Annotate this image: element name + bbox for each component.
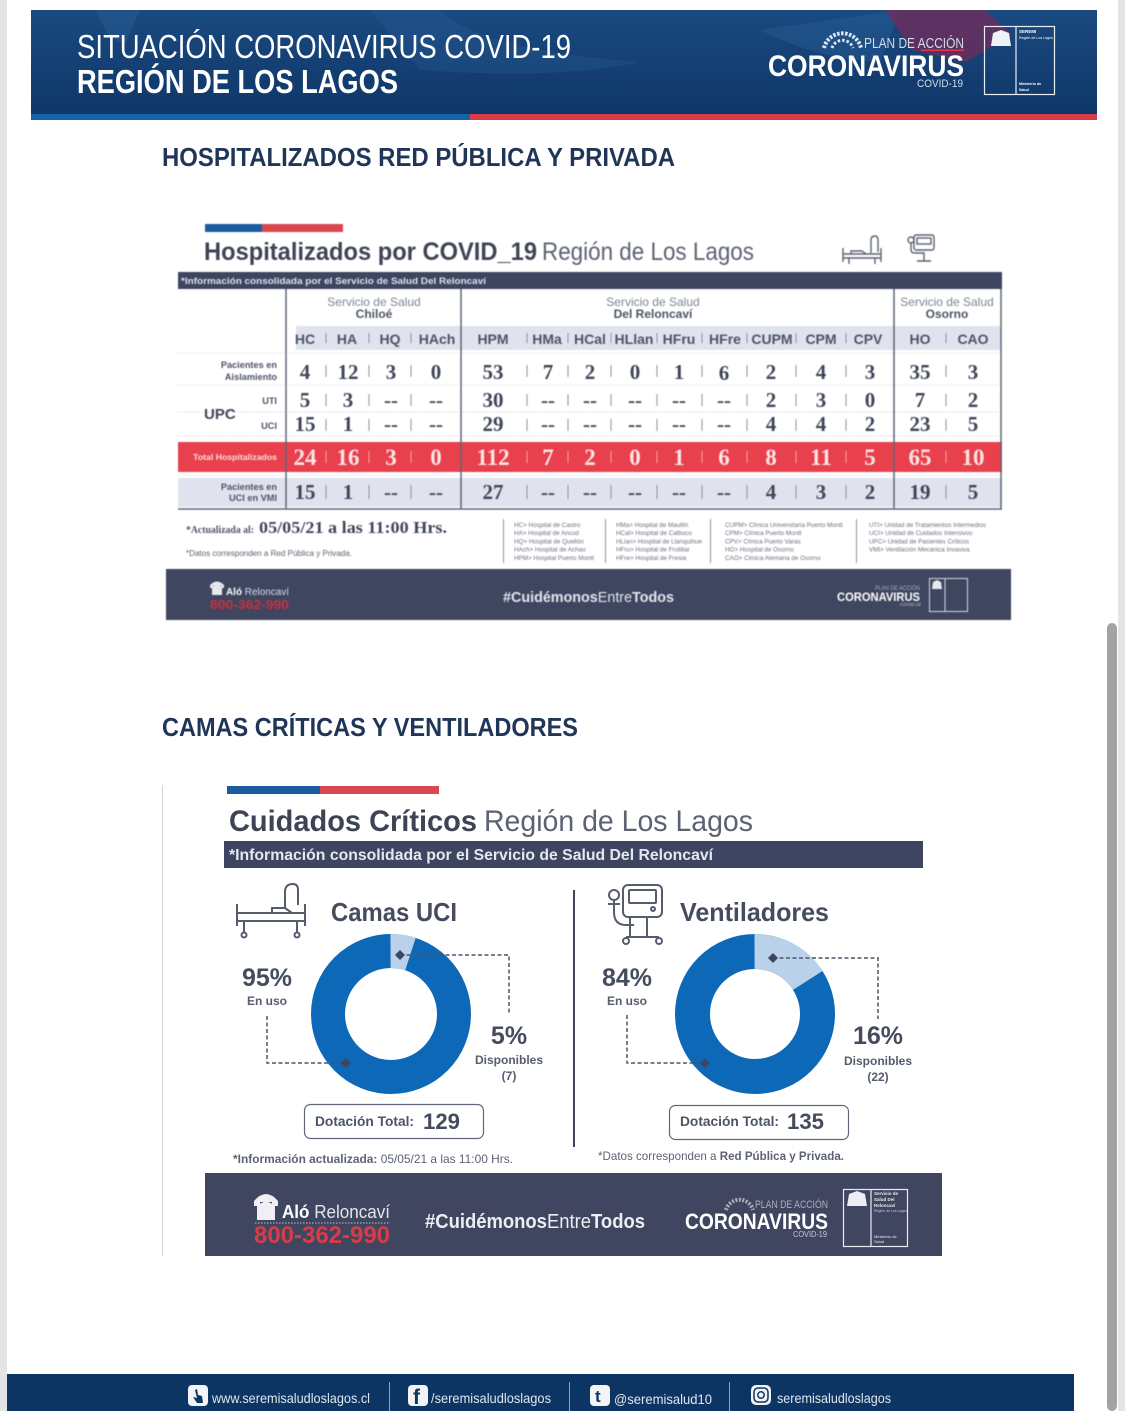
link: web xyxy=(188,1385,370,1406)
callout: en uso: 84% xyxy=(602,964,652,992)
row: pacientes en UCI en VMI: 15 xyxy=(294,480,316,504)
row: UCI: -- xyxy=(583,412,597,436)
row labels: UPC xyxy=(204,406,236,423)
logo: coronavirus: PLAN DE ACCIÓN xyxy=(755,1198,828,1211)
table title: Región de Los Lagos xyxy=(542,238,754,266)
callout: en uso: 95% xyxy=(242,964,292,992)
link: facebook: /seremisaludloslagos xyxy=(431,1390,551,1406)
row: pacientes en aislamiento: 6 xyxy=(719,361,729,385)
icon: hospital bed xyxy=(237,884,305,938)
dotación total xyxy=(304,1104,484,1138)
heading: camas críticas: CAMAS CRÍTICAS Y VENTILADORES xyxy=(162,712,578,742)
column headers: CPV xyxy=(854,331,883,347)
legend of abbreviations: HAch> Hospital de Achao xyxy=(514,546,586,554)
row: UTI: 3 xyxy=(816,388,826,412)
row: pacientes en UCI en VMI: -- xyxy=(384,480,398,504)
logo: coronavirus xyxy=(685,1198,828,1239)
footer band: table: #CuidémonosEntreTodos xyxy=(503,589,674,606)
row: UCI: 4 xyxy=(816,412,827,436)
row: pacientes en aislamiento: 4 xyxy=(816,360,827,384)
row: pacientes en aislamiento: 35 xyxy=(910,360,930,384)
row: pacientes en aislamiento: 12 xyxy=(338,360,358,384)
row: pacientes en UCI en VMI: 1 xyxy=(343,480,353,504)
row: total hospitalizados: 0 xyxy=(430,445,442,470)
row labels: UTI xyxy=(262,396,277,406)
column headers: HC xyxy=(295,331,315,347)
panel title: Cuidados Críticos xyxy=(229,805,477,838)
column headers: HCal xyxy=(574,331,606,347)
row: pacientes en UCI en VMI: 2 xyxy=(865,480,875,504)
column headers: HFru xyxy=(663,331,695,347)
column headers: CUPM xyxy=(751,331,793,347)
row: total hospitalizados: 11 xyxy=(810,445,832,470)
banner title: SITUACIÓN CORONAVIRUS COVID-19 xyxy=(77,28,571,65)
column headers: CPM xyxy=(805,331,837,347)
hotline: 800-362-990 xyxy=(254,1222,390,1249)
icon: telephone xyxy=(254,1194,278,1220)
row: UTI: 3 xyxy=(343,388,353,412)
donut chart: camas UCI xyxy=(328,951,454,1077)
callout: disponibles: 16% xyxy=(853,1022,903,1050)
row: total hospitalizados: 65 xyxy=(908,445,932,470)
header bands xyxy=(178,326,1002,507)
note: *Información actualizada: 05/05/21 a las 11:00 Hrs. xyxy=(233,1152,513,1166)
divider xyxy=(573,890,575,1147)
legend of abbreviations: HFru> Hospital de Frutillar xyxy=(616,546,690,554)
panel title: Región de Los Lagos xyxy=(484,805,753,838)
section: camas UCI xyxy=(233,884,543,1166)
row: total hospitalizados: 24 xyxy=(294,445,317,470)
footer band: cuidados críticos xyxy=(205,1173,942,1256)
row: UTI: -- xyxy=(384,388,398,412)
row: total hospitalizados: 3 xyxy=(385,445,397,470)
banner colour strip xyxy=(31,114,1097,120)
row: pacientes en aislamiento: 3 xyxy=(386,360,396,384)
column headers: HAch xyxy=(419,331,455,347)
footer band: table: 800-362-990 xyxy=(210,598,289,612)
row: UTI: -- xyxy=(541,388,555,412)
row: pacientes en aislamiento: 2 xyxy=(766,360,776,384)
column headers: HQ xyxy=(380,331,401,347)
row: pacientes en aislamiento: 53 xyxy=(482,360,504,384)
row labels: Total Hospitalizados xyxy=(193,452,277,462)
logo: seremi ministerio de salud: Región de Los Lagos xyxy=(1019,36,1053,40)
icon: hospital bed xyxy=(843,236,881,264)
total row separators xyxy=(326,451,946,463)
logo: coronavirus: CORONAVIRUS xyxy=(685,1209,828,1234)
callout: disponibles: 5% xyxy=(491,1022,527,1050)
service labels: Chiloé xyxy=(356,307,393,321)
hotline xyxy=(254,1202,390,1249)
hotline: Aló Reloncaví xyxy=(282,1202,390,1222)
row: UTI: 30 xyxy=(482,388,504,412)
legend of abbreviations: CPM> Clínica Puerto Montt xyxy=(725,530,802,537)
info bar: *Información consolidada por el Servicio de Salud Del Reloncaví xyxy=(229,847,714,864)
legend of abbreviations: VMI> Ventilación Mecánica Invasiva xyxy=(869,546,970,554)
row: UTI: -- xyxy=(672,388,686,412)
row: pacientes en aislamiento: 4 xyxy=(300,360,311,384)
service labels: Del Reloncaví xyxy=(614,307,693,321)
panel title xyxy=(229,805,753,838)
footer band: table: PLAN DE ACCIÓN xyxy=(875,585,920,592)
header banner xyxy=(31,10,1097,120)
row: pacientes en aislamiento: 3 xyxy=(865,360,875,384)
logo: servicio de salud: Ministerio de xyxy=(874,1234,897,1239)
banner title: REGIÓN DE LOS LAGOS xyxy=(77,63,398,100)
logo: servicio de salud xyxy=(844,1189,908,1247)
row labels: Pacientes en xyxy=(221,482,277,492)
row: UTI: -- xyxy=(717,388,731,412)
dotación total: Dotación Total: xyxy=(315,1113,414,1129)
row: UTI: 7 xyxy=(915,388,925,412)
link: tumblr: t xyxy=(595,1387,601,1406)
row: pacientes en aislamiento: 2 xyxy=(585,360,595,384)
footer band: table xyxy=(166,569,1011,620)
update note xyxy=(186,518,447,558)
row labels: Pacientes en xyxy=(221,360,277,370)
row: pacientes en UCI en VMI: 4 xyxy=(766,480,777,504)
legend of abbreviations: CAO> Clínica Alemana de Osorno xyxy=(725,555,821,562)
row: pacientes en UCI en VMI: -- xyxy=(541,480,555,504)
callout: disponibles: (22) xyxy=(867,1070,889,1084)
logo: seremi ministerio de salud: SEREMI xyxy=(1019,29,1036,34)
column headers: HO xyxy=(910,331,931,347)
row: pacientes en aislamiento: 1 xyxy=(674,360,684,384)
legend of abbreviations: HQ> Hospital de Quellón xyxy=(514,538,584,546)
row: total hospitalizados: 5 xyxy=(864,445,876,470)
row labels: UCI en VMI xyxy=(229,493,277,503)
dotación total: Dotación Total: xyxy=(680,1113,779,1129)
panel: hospitalizados table xyxy=(166,224,1011,620)
update note: *Datos corresponden a Red Pública y Privada. xyxy=(186,549,352,558)
row: UCI: -- xyxy=(384,412,398,436)
row: UTI: 2 xyxy=(968,388,978,412)
donut chart: ventiladores xyxy=(692,952,818,1076)
legend of abbreviations: CPV> Clínica Puerto Varas xyxy=(725,538,801,546)
panel: cuidados críticos xyxy=(162,785,942,1256)
link: tumblr: @seremisalud10 xyxy=(614,1391,712,1407)
legend of abbreviations: HLlan> Hospital de Llanquihue xyxy=(616,538,702,546)
legend of abbreviations: UCI> Unidad de Cuidados Intensivos xyxy=(869,530,972,537)
logo: coronavirus: COVID-19 xyxy=(793,1230,828,1239)
row: total hospitalizados: 16 xyxy=(336,445,360,470)
row: UCI: -- xyxy=(672,412,686,436)
icon: ventilator xyxy=(908,235,934,261)
row: UCI: -- xyxy=(628,412,642,436)
column headers: HA xyxy=(337,331,357,347)
info bar: *Información consolidada por el Servicio de Salud Del Reloncaví xyxy=(181,276,486,287)
row: total hospitalizados: 2 xyxy=(584,445,596,470)
icon: ventilator xyxy=(608,885,662,944)
row: total hospitalizados: 112 xyxy=(476,445,510,470)
row: pacientes en UCI en VMI: 19 xyxy=(910,480,930,504)
logo: plan de acción coronavirus: PLAN DE ACCIÓN xyxy=(864,35,964,52)
service labels xyxy=(327,295,994,321)
callout: en uso: En uso xyxy=(607,994,647,1008)
callout: en uso xyxy=(602,964,710,1068)
footer bar: social links xyxy=(7,1374,1074,1411)
callout: disponibles: (7) xyxy=(502,1069,516,1083)
link: tumblr xyxy=(590,1385,712,1407)
link: web: www.seremisaludloslagos.cl xyxy=(211,1390,370,1406)
callout: disponibles xyxy=(768,953,912,1084)
row: total hospitalizados: 6 xyxy=(718,445,730,470)
row: UCI: -- xyxy=(717,412,731,436)
legend of abbreviations: HC> Hospital de Castro xyxy=(514,522,581,529)
column headers: HLlan xyxy=(615,331,653,347)
column headers xyxy=(295,331,989,347)
row: pacientes en UCI en VMI: 27 xyxy=(482,480,504,504)
link: instagram xyxy=(751,1385,891,1406)
service labels: Servicio de Salud xyxy=(327,295,421,309)
row: UTI: -- xyxy=(628,388,642,412)
row: UTI: -- xyxy=(429,388,443,412)
row labels: UCI xyxy=(261,421,277,431)
row: total hospitalizados: 1 xyxy=(673,445,685,470)
row: UCI: 4 xyxy=(766,412,777,436)
legend of abbreviations: HPM> Hospital Puerto Montt xyxy=(514,555,594,562)
row: UCI: 23 xyxy=(910,412,930,436)
footer band: table: COVID-19 xyxy=(900,602,921,607)
row: UCI: 1 xyxy=(343,412,353,436)
row: UTI: 5 xyxy=(300,388,310,412)
row labels: Aislamiento xyxy=(225,372,277,382)
dotación total xyxy=(670,1106,848,1140)
service labels: Servicio de Salud xyxy=(900,295,994,309)
row: pacientes en aislamiento xyxy=(300,360,978,385)
row labels xyxy=(193,360,277,503)
info bar xyxy=(224,841,923,868)
row: UCI: -- xyxy=(429,412,443,436)
logo: seremi ministerio de salud: Ministerio de xyxy=(1019,82,1041,86)
row: total hospitalizados: 10 xyxy=(962,445,984,470)
legend of abbreviations: UPC> Unidad de Pacientes Críticos xyxy=(869,538,969,546)
logo: plan de acción coronavirus: COVID-19 xyxy=(917,78,963,90)
link: facebook: f xyxy=(413,1386,421,1409)
logo: plan de acción coronavirus xyxy=(768,33,964,90)
row: UTI: 0 xyxy=(865,388,875,412)
legend of abbreviations: HFre> Hospital de Fresia xyxy=(616,555,687,562)
row: pacientes en UCI en VMI: -- xyxy=(717,480,731,504)
row: UCI: 29 xyxy=(482,412,504,436)
row: pacientes en UCI en VMI xyxy=(294,480,978,504)
callout: disponibles: Disponibles xyxy=(844,1054,912,1068)
table title xyxy=(204,238,754,266)
row: pacientes en UCI en VMI: -- xyxy=(672,480,686,504)
logo: servicio de salud: Salud Del xyxy=(874,1197,895,1202)
update note: 05/05/21 a las 11:00 Hrs. xyxy=(259,518,447,537)
table frame lines xyxy=(178,289,1002,509)
row: pacientes en UCI en VMI: -- xyxy=(583,480,597,504)
row: UTI: -- xyxy=(583,388,597,412)
legend of abbreviations: HCal> Hospital de Calbuco xyxy=(616,530,692,537)
accent bar xyxy=(227,786,439,794)
dotación total: 129 xyxy=(423,1109,460,1134)
update note: *Actualizada al: xyxy=(186,525,254,536)
table title: Hospitalizados por COVID_19 xyxy=(204,238,537,266)
callout: en uso: En uso xyxy=(247,994,287,1008)
callout: en uso xyxy=(242,964,351,1068)
logo: servicio de salud: Servicio de xyxy=(874,1191,899,1196)
legend of abbreviations: HMa> Hospital de Maullín xyxy=(616,522,689,529)
link: facebook xyxy=(408,1385,551,1409)
row: pacientes en UCI en VMI: 5 xyxy=(968,480,978,504)
row: total hospitalizados: 7 xyxy=(542,445,554,470)
legend of abbreviations: UTI> Unidad de Tratamientos Intermedios xyxy=(869,522,986,529)
row: UCI xyxy=(294,412,978,436)
row: UTI xyxy=(300,388,978,412)
dotted row lines xyxy=(178,353,1000,475)
row: UCI: 2 xyxy=(865,412,875,436)
legend of abbreviations: HA> Hospital de Ancud xyxy=(514,530,579,537)
row: pacientes en aislamiento: 7 xyxy=(543,360,553,384)
logo: seremi ministerio de salud xyxy=(984,26,1054,95)
callout: disponibles: Disponibles xyxy=(475,1053,543,1067)
row: total hospitalizados: 0 xyxy=(629,445,641,470)
note: *Datos corresponden a Red Pública y Privada. xyxy=(598,1149,844,1163)
row: UCI: -- xyxy=(541,412,555,436)
banner title xyxy=(77,28,571,100)
link: instagram: seremisaludloslagos xyxy=(777,1390,891,1406)
footer band: table: CORONAVIRUS xyxy=(837,590,920,604)
logo: servicio de salud: Región de Los Lagos xyxy=(874,1209,907,1213)
row: pacientes en UCI en VMI: 3 xyxy=(816,480,826,504)
label: Camas UCI xyxy=(331,897,457,927)
logo: servicio de salud: Salud xyxy=(874,1239,884,1244)
column headers: HMa xyxy=(532,331,562,347)
logo: plan de acción coronavirus: CORONAVIRUS xyxy=(768,50,964,83)
dotación total: 135 xyxy=(787,1109,824,1134)
row: UCI: 5 xyxy=(968,412,978,436)
logo: seremi ministerio de salud: Salud xyxy=(1019,88,1029,92)
service labels: Servicio de Salud xyxy=(606,295,700,309)
service labels: Osorno xyxy=(926,307,968,321)
accent bar xyxy=(205,224,343,232)
legend of abbreviations: CUPM> Clínica Universitaria Puerto Montt xyxy=(725,522,843,529)
footer band: table: Aló Reloncaví xyxy=(226,587,289,598)
column separators xyxy=(326,333,946,499)
logo: servicio de salud: Reloncaví xyxy=(874,1203,896,1208)
section: ventiladores xyxy=(598,885,912,1163)
scrollbar xyxy=(1107,623,1117,1411)
legend of abbreviations: HO> Hospital de Osorno xyxy=(725,546,794,554)
column headers: CAO xyxy=(957,331,989,347)
row: pacientes en UCI en VMI: -- xyxy=(628,480,642,504)
row: UTI: 2 xyxy=(766,388,776,412)
total row band xyxy=(178,442,1002,472)
row: total hospitalizados xyxy=(294,445,984,470)
column headers: HFre xyxy=(709,331,741,347)
row: UCI: 15 xyxy=(294,412,316,436)
label: Ventiladores xyxy=(680,897,829,927)
info bar xyxy=(178,272,1002,289)
hashtag: #CuidémonosEntreTodos xyxy=(425,1211,645,1233)
callout: disponibles xyxy=(395,950,543,1083)
row: pacientes en UCI en VMI: -- xyxy=(429,480,443,504)
legend of abbreviations xyxy=(504,519,986,563)
heading: hospitalizados: HOSPITALIZADOS RED PÚBLICA Y PRIVADA xyxy=(162,142,675,172)
column headers: HPM xyxy=(477,331,509,347)
row: pacientes en aislamiento: 0 xyxy=(431,360,441,384)
row: total hospitalizados: 8 xyxy=(765,445,777,470)
row: pacientes en aislamiento: 3 xyxy=(968,360,978,384)
row: pacientes en aislamiento: 0 xyxy=(630,360,640,384)
